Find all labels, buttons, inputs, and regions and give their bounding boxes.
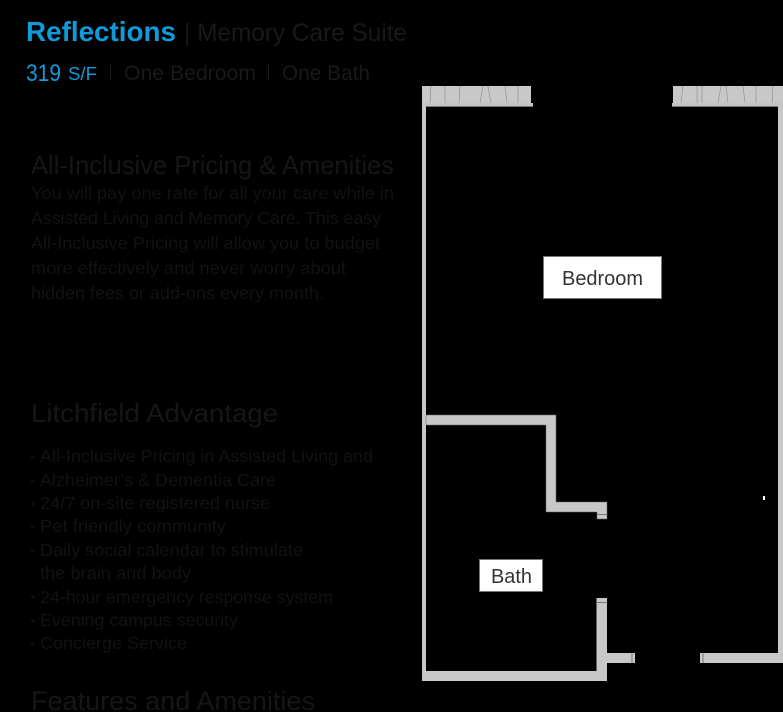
bullet list: 24/7 on-site registered nurse bbox=[40, 493, 270, 513]
label: bath: Bath bbox=[491, 566, 532, 588]
bullet list: Daily social calendar to stimulate bbox=[40, 540, 303, 560]
unit details: One Bath bbox=[282, 62, 370, 85]
square footage: 319 bbox=[26, 60, 61, 87]
panel: all-inclusive pricing bbox=[31, 150, 394, 303]
label: bedroom bbox=[544, 256, 662, 298]
text block bbox=[31, 183, 394, 303]
bullet list: Alzheimer’s & Dementia Care bbox=[40, 470, 276, 490]
text block: Assisted Living and Memory Care. This easy bbox=[31, 208, 381, 228]
heading: Litchfield Advantage bbox=[31, 398, 278, 428]
bullet list: Pet friendly community bbox=[40, 516, 226, 536]
header bbox=[26, 16, 407, 87]
bullet list: 24-hour emergency response system bbox=[40, 587, 333, 607]
door jambs bbox=[597, 514, 703, 663]
bullet list bbox=[31, 446, 373, 653]
interior wall bbox=[426, 415, 607, 519]
bullet list: Concierge Service bbox=[40, 633, 187, 653]
text block: All-Inclusive Pricing will allow you to budget bbox=[31, 233, 380, 253]
unit details: One Bedroom bbox=[124, 62, 256, 85]
bullet list: the brain and body bbox=[40, 563, 191, 583]
title: Reflections bbox=[26, 16, 176, 47]
bullet list: All-Inclusive Pricing in Assisted Living and bbox=[40, 446, 373, 466]
text block: more effectively and never worry about bbox=[31, 258, 346, 278]
exterior walls bbox=[422, 107, 783, 681]
marker dot bbox=[763, 496, 765, 500]
label: bath bbox=[480, 560, 542, 592]
square footage bbox=[26, 60, 97, 87]
heading: All-Inclusive Pricing & Amenities bbox=[31, 150, 394, 180]
square footage: S/F bbox=[68, 64, 97, 84]
unit details bbox=[110, 62, 370, 85]
bullet list: Evening campus security bbox=[40, 610, 238, 630]
window: right bbox=[672, 86, 783, 107]
text block: hidden fees or add-ons every month. bbox=[31, 283, 324, 303]
floor plan bbox=[422, 86, 783, 681]
label: bedroom: Bedroom bbox=[562, 268, 643, 290]
text block: You will pay one rate for all your care while in bbox=[31, 183, 394, 203]
panel: litchfield advantage bbox=[31, 398, 373, 653]
subtitle: | Memory Care Suite bbox=[184, 19, 407, 47]
window: left bbox=[422, 86, 533, 107]
